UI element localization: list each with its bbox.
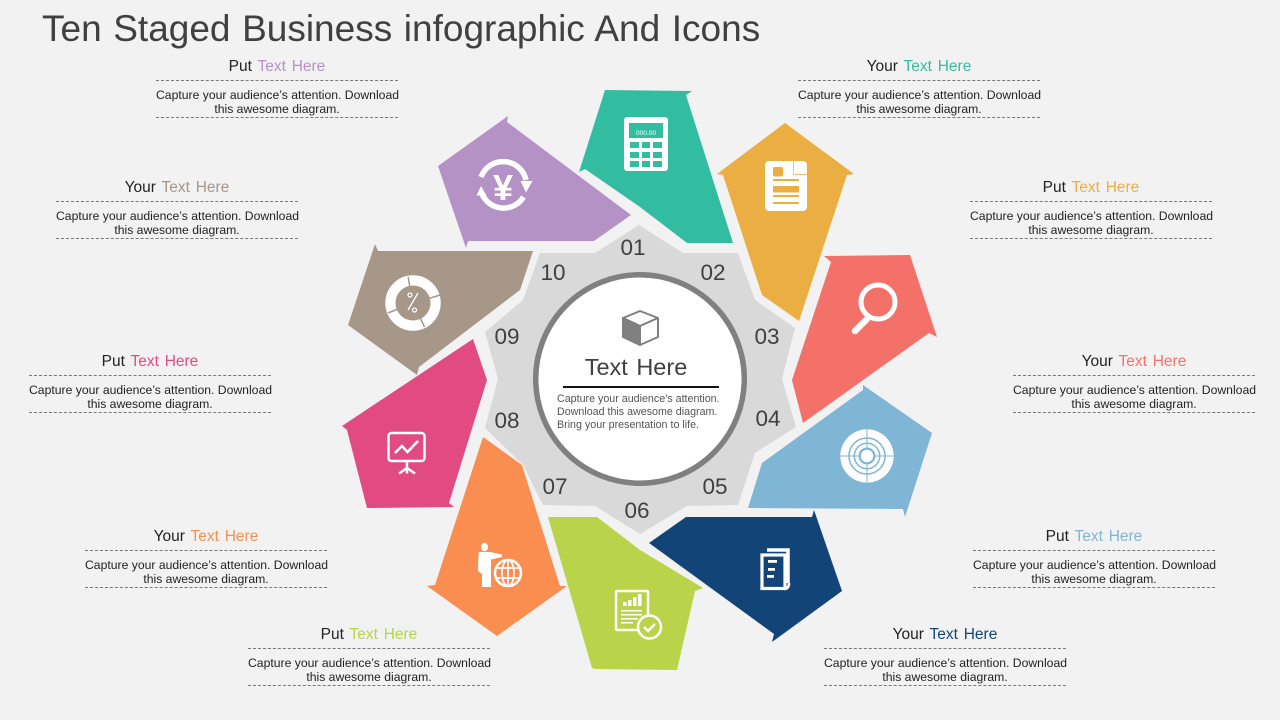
icon: percent donut — [388, 277, 440, 327]
step numbers: 10 — [540, 260, 566, 285]
segment 09: taupe percent donut — [348, 244, 533, 375]
text block: Put Text Here purple — [156, 58, 399, 118]
icon: calculator — [624, 117, 668, 171]
central gray star with step numbers — [485, 225, 796, 534]
text block: Your Text Here taupe — [56, 179, 299, 239]
segment 01: teal calculator — [579, 90, 733, 243]
center heading: Text Here — [585, 354, 687, 380]
text block: Your Text Here navy: Your Text Here — [893, 626, 997, 643]
center underline — [563, 386, 719, 388]
text block: Put Text Here pink: Capture your audience’s attention. Download — [29, 383, 272, 397]
text block: Put Text Here purple: Capture your audience’s attention. Download — [156, 88, 399, 102]
icon: yen exchange: ¥ — [493, 167, 513, 208]
text block: Your Text Here coral: Capture your audience’s attention. Download — [1013, 383, 1256, 397]
center body text — [557, 393, 720, 431]
text block: Your Text Here taupe: Your Text Here — [125, 179, 229, 196]
step numbers — [494, 235, 781, 523]
segment 02: amber document — [717, 123, 854, 321]
text block: Your Text Here navy: this awesome diagram. — [882, 670, 1008, 684]
segment 07: orange presenter with globe — [427, 437, 567, 636]
text block: Put Text Here lime — [248, 626, 491, 686]
title: Ten Staged Business infographic And Icons — [42, 8, 760, 49]
text block: Your Text Here taupe: this awesome diagram. — [114, 223, 240, 237]
text block: Put Text Here lime: Put Text Here — [321, 626, 417, 643]
icon: cube — [623, 311, 658, 345]
text block: Put Text Here amber: Put Text Here — [1043, 179, 1139, 196]
text block: Put Text Here purple: this awesome diagram. — [214, 102, 340, 116]
text block: Your Text Here teal: Capture your audience’s attention. Download — [798, 88, 1041, 102]
text block: Put Text Here pink — [29, 353, 272, 413]
text block: Put Text Here lime: Capture your audience’s attention. Download — [248, 656, 491, 670]
text block: Put Text Here lime: this awesome diagram. — [306, 670, 432, 684]
icon: calculator: 000.00 — [636, 130, 656, 137]
center body text: Download this awesome diagram. — [557, 406, 717, 418]
text block: Your Text Here taupe: Capture your audience’s attention. Download — [56, 209, 299, 223]
segment 03: coral magnifier — [792, 255, 937, 423]
step numbers: 05 — [702, 474, 728, 499]
text block: Put Text Here light blue — [973, 528, 1216, 588]
segment 05: navy documents — [649, 510, 842, 642]
segment 10: purple yen exchange — [438, 116, 631, 248]
text block: Your Text Here navy: Capture your audience’s attention. Download — [824, 656, 1067, 670]
icon: document — [765, 161, 807, 211]
step numbers: 08 — [494, 408, 520, 433]
text block: Your Text Here orange — [85, 528, 328, 588]
text block: Put Text Here light blue: Capture your audience’s attention. Download — [973, 558, 1216, 572]
icon: document stack — [762, 550, 789, 589]
center body text: Capture your audience’s attention. — [557, 393, 720, 405]
text block: Your Text Here navy — [824, 626, 1067, 686]
step numbers: 02 — [700, 260, 726, 285]
text block: Put Text Here pink: Put Text Here — [102, 353, 198, 370]
text block: Put Text Here purple: Put Text Here — [229, 58, 325, 75]
icon: target — [840, 429, 894, 483]
segment 06: lime report — [548, 517, 703, 670]
text block: Put Text Here pink: this awesome diagram. — [87, 397, 213, 411]
text block: Your Text Here coral: Your Text Here — [1082, 353, 1186, 370]
text block: Your Text Here orange: this awesome diagram. — [143, 572, 269, 586]
step numbers: 04 — [755, 406, 781, 431]
text block: Put Text Here amber: this awesome diagram. — [1028, 223, 1154, 237]
text block: Your Text Here teal: Your Text Here — [867, 58, 971, 75]
step numbers: 01 — [620, 235, 646, 260]
text block: Put Text Here light blue: Put Text Here — [1046, 528, 1142, 545]
text block: Your Text Here teal — [798, 58, 1041, 118]
text block: Your Text Here teal: this awesome diagram. — [856, 102, 982, 116]
icon: presentation board — [388, 433, 424, 474]
segment 08: pink presentation board — [342, 339, 487, 508]
text block: Your Text Here coral — [1013, 353, 1256, 413]
text block: Put Text Here amber — [970, 179, 1213, 239]
icon: person and globe — [478, 543, 521, 587]
center circle — [536, 275, 744, 483]
step numbers: 09 — [494, 324, 520, 349]
text block: Your Text Here orange: Your Text Here — [154, 528, 258, 545]
step numbers: 07 — [542, 474, 568, 499]
step numbers: 03 — [754, 324, 780, 349]
text block: Put Text Here light blue: this awesome diagram. — [1031, 572, 1157, 586]
icon: magnifying glass — [855, 285, 895, 331]
text block: Put Text Here amber: Capture your audience’s attention. Download — [970, 209, 1213, 223]
text block: Your Text Here orange: Capture your audience’s attention. Download — [85, 558, 328, 572]
segment 04: light blue target — [748, 385, 932, 517]
text block: Your Text Here coral: this awesome diagram. — [1071, 397, 1197, 411]
icon: report with check — [616, 591, 661, 638]
icon: yen exchange — [476, 162, 532, 208]
step numbers: 06 — [624, 498, 650, 523]
center body text: Bring your presentation to life. — [557, 419, 699, 431]
